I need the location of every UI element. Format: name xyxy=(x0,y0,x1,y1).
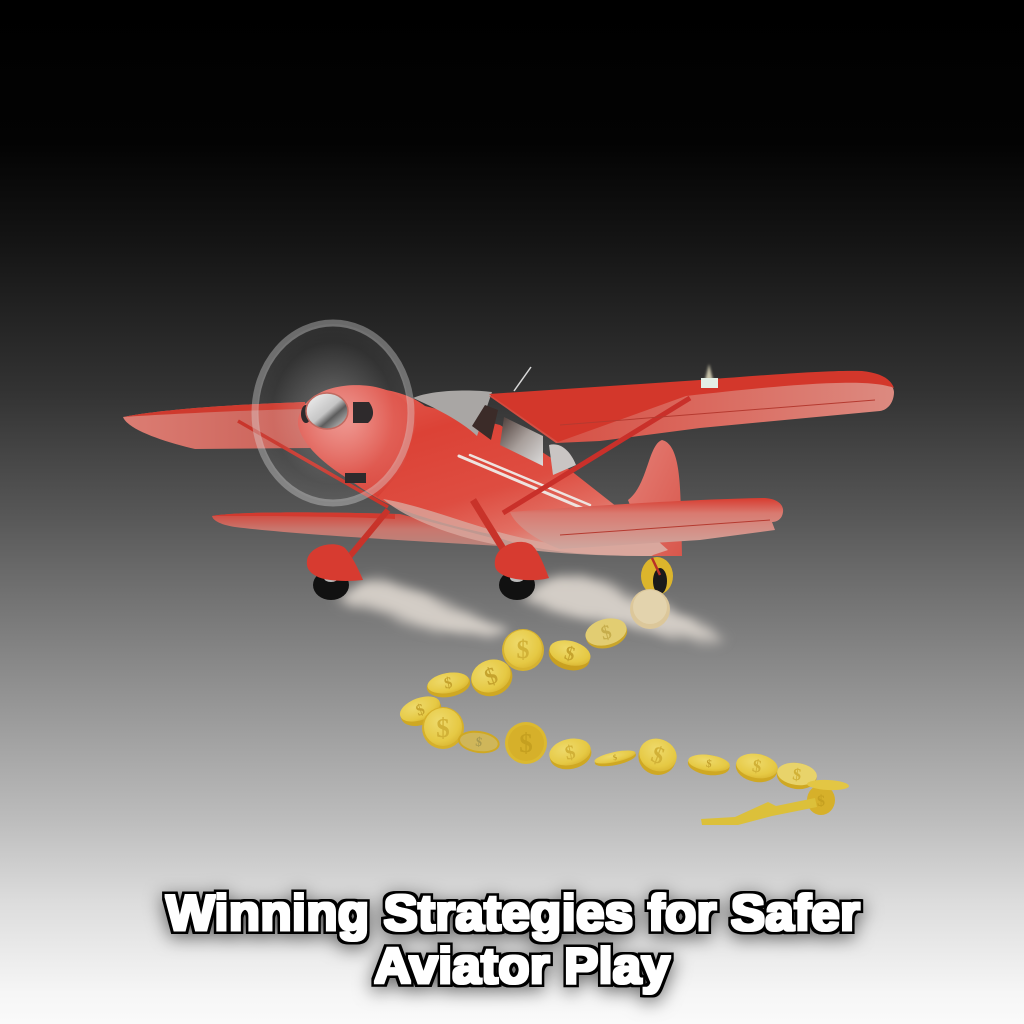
coin trail: $ xyxy=(817,793,825,810)
coins: $ xyxy=(599,621,614,645)
upper left wing xyxy=(123,402,310,449)
coin trail: $ xyxy=(612,753,618,762)
engine cowl xyxy=(298,385,416,497)
coin trail: $ xyxy=(648,742,668,770)
title xyxy=(166,885,860,994)
upper right wing leading edge xyxy=(489,371,894,442)
coin trail: $ xyxy=(414,701,427,720)
spinner xyxy=(306,393,348,429)
right wing strut xyxy=(503,398,690,513)
airplane xyxy=(123,323,894,600)
tail wheel with coin xyxy=(641,557,673,595)
lower left wing xyxy=(212,512,500,546)
coins xyxy=(582,614,630,653)
coin trail: $ xyxy=(705,758,713,770)
cowl openings xyxy=(301,402,373,483)
left landing gear xyxy=(307,510,388,600)
coin trail: $ xyxy=(791,764,803,785)
left wing strut xyxy=(238,421,388,507)
lower right wing xyxy=(510,498,783,549)
title: Winning Strategies for Safer xyxy=(166,885,860,941)
edge-on coin slivers xyxy=(701,798,817,825)
vertical tail fin xyxy=(628,440,682,556)
rivets line on lower wing xyxy=(560,520,770,535)
coin trail: $ xyxy=(443,674,454,693)
coin trail: $ xyxy=(751,755,763,777)
coin trail: $ xyxy=(519,728,533,758)
smoke trail xyxy=(338,576,724,642)
fuselage underside xyxy=(383,499,660,556)
title: Aviator Play xyxy=(374,938,670,994)
front windscreen xyxy=(472,405,498,440)
cabin window xyxy=(500,417,543,466)
canopy xyxy=(413,390,492,436)
coin trail: $ xyxy=(563,741,577,765)
coin trail: $ xyxy=(481,663,501,691)
fuselage stripes xyxy=(459,455,590,508)
coin trail xyxy=(397,589,849,825)
coin trail: $ xyxy=(516,635,530,664)
right wing rib line xyxy=(560,400,875,425)
antenna xyxy=(514,367,531,391)
coin trail: $ xyxy=(475,734,484,749)
wing light xyxy=(701,364,718,388)
coin trail: $ xyxy=(562,642,577,666)
right landing gear xyxy=(473,500,549,600)
coin trail: $ xyxy=(436,713,450,743)
rear window xyxy=(549,444,576,475)
upper right wing underside xyxy=(489,372,894,443)
fuselage xyxy=(340,390,668,556)
propeller disc xyxy=(255,323,411,503)
pale coin under tail xyxy=(630,589,670,629)
